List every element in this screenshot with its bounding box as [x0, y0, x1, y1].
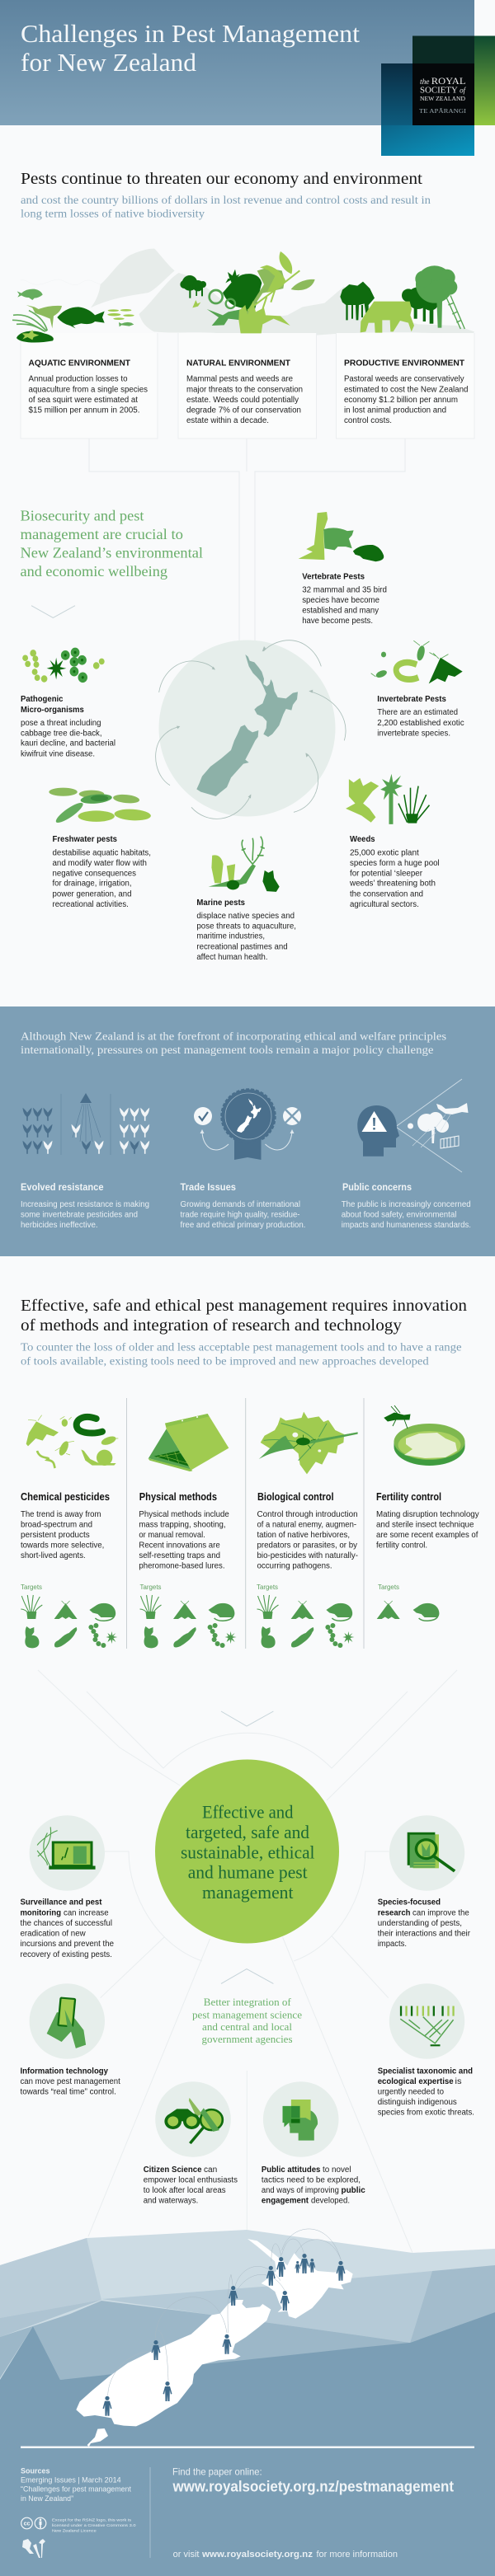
- text: public concerns: impacts and humaneness standards.: [342, 1221, 471, 1230]
- text: weeds: Weeds: [350, 834, 375, 844]
- central goal circle: management: [202, 1882, 294, 1903]
- text: freshwater pests: power generation, and: [53, 889, 132, 899]
- box outline: [178, 333, 317, 439]
- text: biological control: predators or parasites, or by: [257, 1540, 358, 1550]
- column dividers: [127, 1398, 364, 1649]
- text: evolved resistance: [21, 1200, 149, 1230]
- footer: low-poly background: [0, 2230, 495, 2576]
- logo: Royal Society of New Zealand: [381, 36, 495, 156]
- central goal circle: and humane pest: [188, 1862, 308, 1883]
- text: citizen science: empower local enthusiasts: [144, 2176, 238, 2184]
- text: productive body: economy $1.2 billion per annum: [344, 396, 458, 405]
- text: licence: [52, 2518, 136, 2534]
- footer rule: [21, 2447, 474, 2448]
- panel: specialist expertise: [378, 1983, 474, 2118]
- text: sources: Emerging Issues | March 2014: [21, 2476, 121, 2485]
- text: information technology: can move pest management: [20, 2077, 120, 2086]
- icon: phylogenetic tree: [400, 2006, 454, 2045]
- text: physical methods: mass trapping, shooting,: [139, 1519, 226, 1529]
- text: freshwater pests: for drainage, irrigation,: [53, 880, 132, 889]
- text: specialist: [378, 2066, 474, 2118]
- heading: innovation: [21, 1297, 467, 1335]
- text: pathogenic micro-organisms: pose a threat including: [21, 719, 101, 728]
- text: trade issues: free and ethical primary production.: [180, 1221, 305, 1230]
- text: surveillance: Surveillance and pest: [20, 1898, 102, 1907]
- subheading: tools: [21, 1342, 462, 1368]
- icon: binoculars and magnifier: [164, 2098, 223, 2143]
- icon: pathogenic micro-organisms: [22, 648, 105, 683]
- text: weeds: 25,000 exotic plant: [350, 848, 419, 857]
- text: specialist: distinguish indigenous: [378, 2098, 457, 2107]
- text: public attitudes: and ways of improving: [262, 2186, 339, 2195]
- text: pathogenic micro-organisms: kiwifruit vine disease.: [21, 749, 95, 758]
- heading: policy challenge: internationally, pressures on pest management tools remain a major policy challenge: [21, 1044, 434, 1057]
- text: better integration: [192, 1996, 302, 2045]
- label: targets: Targets: [378, 1584, 399, 1591]
- text: evolved resistance: herbicides ineffective.: [21, 1221, 98, 1230]
- text: licence: Except for the RSNZ logo, this work is: [52, 2518, 132, 2523]
- text: surveillance: the chances of successful: [20, 1919, 112, 1928]
- text: surveillance: eradication of new: [20, 1930, 86, 1939]
- label: targets: Targets: [257, 1584, 278, 1591]
- icon: small plant and bird mark: [22, 2539, 45, 2558]
- logo: Royal Society of New Zealand: the ROYAL: [420, 75, 465, 87]
- text: marine pests: [196, 898, 296, 962]
- text: natural body: [186, 374, 303, 425]
- text: fertility control: and sterile insect technique: [376, 1519, 474, 1529]
- central goal circle: [155, 1759, 339, 1944]
- heading: biosecurity: and economic wellbeing: [20, 563, 167, 579]
- text: sources: “Challenges for pest management: [21, 2485, 131, 2494]
- panel: information technology: [20, 1983, 120, 2096]
- icons: natural environment plants and birds: [180, 251, 315, 333]
- text: trade issues: trade require high quality, residue-: [180, 1211, 300, 1220]
- text: public attitudes: engagement: [262, 2196, 309, 2206]
- text: citizen science: [144, 2165, 238, 2206]
- text: species-focused: research: [378, 1908, 411, 1918]
- text: natural body: estate. Weeds could potentially: [186, 396, 299, 405]
- text: biological control: Control through introduction: [257, 1509, 358, 1519]
- label: targets: Targets: [21, 1584, 42, 1591]
- logo: Royal Society of New Zealand: SOCIETY of: [420, 86, 466, 96]
- heading: fertility control: Fertility control: [376, 1491, 441, 1503]
- title: for New Zealand: [21, 48, 196, 77]
- text: vertebrate pests: have become pests.: [302, 617, 373, 626]
- text: fertility control: Mating disruption technology: [376, 1509, 479, 1519]
- icon: creative commons: cc: [24, 2521, 30, 2527]
- logo: Royal Society of New Zealand: TE APĀRANGI: [419, 107, 467, 115]
- heading: biological control: Biological control: [257, 1491, 333, 1503]
- text: more information: for more information: [317, 2550, 398, 2560]
- text: pathogenic micro-organisms: Pathogenic: [21, 694, 64, 704]
- heading: pests continue: Pests continue to threaten our economy and environment: [21, 170, 422, 188]
- icon: creative commons: [21, 2517, 46, 2529]
- text: physical methods: [139, 1509, 229, 1571]
- title: [21, 19, 360, 77]
- icons: productive environment trees and cow: [340, 265, 464, 333]
- text: citizen science: can: [204, 2165, 217, 2175]
- text: species-focused: can improve the: [412, 1909, 469, 1918]
- text: chemical pesticides: persistent products: [21, 1530, 90, 1540]
- icons: aquatic life: [12, 289, 134, 343]
- heading: biosecurity: [20, 508, 203, 579]
- text: licence: licensed under a Creative Commons 3.0: [52, 2523, 136, 2528]
- text: pathogenic micro-organisms: Micro-organisms: [21, 705, 84, 715]
- text: natural body: estate within a decade.: [186, 416, 269, 425]
- icon: freshwater pests: [49, 788, 151, 826]
- text: freshwater pests: and modify water flow with: [53, 859, 147, 868]
- text: natural body: degrade 7% of our conservation: [186, 406, 301, 415]
- icons: fertility targets: [377, 1601, 439, 1621]
- text: weeds: species form a huge pool: [350, 859, 440, 868]
- text: species-focused: understanding of pests,: [378, 1919, 462, 1928]
- text: productive body: Pastoral weeds are conservatively: [344, 374, 464, 384]
- text: species-focused: their interactions and their: [378, 1930, 471, 1939]
- text: freshwater pests: negative consequences: [53, 869, 136, 879]
- text: chemical pesticides: broad-spectrum and: [21, 1519, 92, 1529]
- box outline: [21, 333, 158, 439]
- text: freshwater pests: destabilise aquatic habitats,: [53, 848, 151, 857]
- text: biological control: of a natural enemy, augmen-: [257, 1519, 356, 1529]
- text: freshwater pests: Freshwater pests: [53, 834, 117, 844]
- text: more information: or visit: [173, 2550, 200, 2560]
- text: surveillance: incursions and prevent the: [20, 1940, 114, 1949]
- text: better integration: pest management science: [192, 2009, 302, 2021]
- text: aquatic body: of sea squirt were estimated at: [28, 396, 138, 405]
- icon: wasp and petri dish: [384, 1405, 465, 1466]
- text: productive body: [344, 374, 469, 425]
- icon: laptop and DNA: [37, 1827, 96, 1870]
- text: aquatic body: [28, 374, 148, 415]
- panel: natural environment: [178, 333, 317, 439]
- heading: physical methods: Physical methods: [139, 1491, 217, 1503]
- text: chemical pesticides: towards more selective,: [21, 1540, 104, 1550]
- text: sources: Sources: [21, 2467, 50, 2476]
- text: productive body: control costs.: [344, 416, 392, 425]
- icon: trap: [148, 1414, 229, 1471]
- heading: policy challenge: Although New Zealand is at the forefront of incorporating ethical and welfare principles: [21, 1031, 446, 1044]
- text: public attitudes: tactics need to be explored,: [262, 2176, 361, 2184]
- icon: hands and phone: [47, 1998, 86, 2048]
- text: find the paper online: Find the paper online:: [172, 2466, 262, 2478]
- panel: aquatic environment: [21, 333, 158, 439]
- subheading: cost of pests: long term losses of native biodiversity: [21, 208, 205, 219]
- text: citizen science: to look after local areas: [144, 2186, 226, 2195]
- text: aquatic body: Annual production losses to: [28, 374, 128, 384]
- text: marine pests: Marine pests: [196, 898, 245, 908]
- text: public attitudes: [262, 2165, 365, 2206]
- text: productive body: in lost animal production and: [344, 406, 446, 415]
- text: citizen science: Citizen Science: [144, 2165, 202, 2175]
- panel: biological control: [257, 1412, 358, 1648]
- text: public attitudes: Public attitudes: [262, 2165, 321, 2175]
- panel: chemical pesticides: [21, 1415, 118, 1648]
- text: surveillance: monitoring: [20, 1908, 61, 1918]
- text: freshwater pests: [53, 834, 151, 909]
- text: pathogenic micro-organisms: kauri decline, and bacterial: [21, 739, 116, 748]
- text: specialist: urgently needed to: [378, 2088, 444, 2097]
- heading: biosecurity: management are crucial to: [20, 526, 183, 542]
- text: chemical pesticides: [21, 1509, 104, 1560]
- panel: citizen science: [144, 2081, 238, 2206]
- text: marine pests: recreational pastimes and: [196, 942, 288, 951]
- panel: public attitudes: [262, 2081, 365, 2206]
- icon: head and speech bubbles: [283, 2100, 318, 2141]
- text: sources: [21, 2467, 131, 2503]
- text: natural body: Mammal pests and weeds are: [186, 374, 293, 384]
- text: weeds: [349, 834, 440, 909]
- text: physical methods: Physical methods include: [139, 1509, 229, 1519]
- icon: invertebrate pests: [371, 640, 463, 683]
- text: specialist: species from exotic threats.: [378, 2109, 474, 2118]
- text: specialist: Specialist taxonomic and: [378, 2066, 473, 2076]
- text: chemical pesticides: The trend is away from: [21, 1509, 101, 1519]
- text: surveillance: [20, 1898, 114, 1959]
- text: vertebrate pests: species have become: [302, 596, 380, 605]
- icon: evolved resistance sprouts and spray: [23, 1093, 149, 1155]
- text: species-focused: [378, 1898, 471, 1949]
- text: evolved resistance: Increasing pest resistance is making: [21, 1200, 149, 1209]
- central goal circle: sustainable, ethical: [181, 1842, 315, 1862]
- connector lines: tools to central goal: [38, 1670, 457, 2253]
- panel: species-focused research: [378, 1815, 471, 1949]
- text: weeds: weeds’ threatening both: [349, 880, 436, 889]
- text: better integration: Better integration of: [204, 1996, 291, 2008]
- text: public attitudes: public: [342, 2185, 365, 2195]
- text: species-focused: impacts.: [378, 1940, 407, 1949]
- text: species-focused: Species-focused: [378, 1898, 441, 1907]
- text: invertebrate pests: [377, 694, 464, 739]
- subheading: tools: of tools available, existing tools need to be improved and new approaches developed: [21, 1355, 429, 1368]
- heading: public concerns: Public concerns: [342, 1181, 412, 1193]
- text: evolved resistance: some invertebrate pesticides and: [21, 1211, 138, 1220]
- text: public concerns: The public is increasingly concerned: [342, 1200, 471, 1209]
- heading: evolved resistance: Evolved resistance: [21, 1181, 104, 1193]
- text: surveillance: recovery of existing pests.: [20, 1950, 112, 1959]
- arrow: chevron down: [31, 606, 75, 617]
- text: invertebrate pests: invertebrate species.: [377, 729, 450, 739]
- header band: [0, 0, 474, 125]
- icons: chemical targets: [21, 1595, 117, 1648]
- heading: innovation: Effective, safe and ethical pest management requires innovation: [21, 1297, 467, 1315]
- text: vertebrate pests: 32 mammal and 35 bird: [302, 585, 387, 594]
- text: vertebrate pests: established and many: [302, 607, 379, 615]
- icons: physical targets: [140, 1595, 237, 1648]
- text: trade issues: [180, 1200, 305, 1230]
- subheading: cost of pests: [21, 194, 431, 219]
- people figures: [102, 2254, 345, 2416]
- text: specialist: is: [455, 2077, 462, 2086]
- text: trade issues: Growing demands of international: [180, 1200, 300, 1209]
- text: weeds: for potential ‘sleeper: [350, 869, 423, 879]
- text: physical methods: self-resetting traps and: [139, 1551, 220, 1560]
- text: vertebrate pests: [302, 571, 387, 626]
- panel: productive environment: [337, 333, 474, 439]
- title: Challenges in Pest Management: [21, 19, 360, 48]
- icon: marine pests: [209, 837, 280, 892]
- panel: physical methods: [139, 1414, 237, 1648]
- text: weeds: agricultural sectors.: [350, 900, 419, 909]
- heading: trade issues: Trade Issues: [180, 1181, 236, 1193]
- text: public attitudes: to novel: [323, 2165, 351, 2175]
- text: invertebrate pests: There are an estimated: [377, 708, 458, 717]
- arrows: pest pathways into map: [156, 640, 346, 819]
- icon: chemical pesticides pests: [26, 1415, 118, 1468]
- text: paper URL: www.royalsociety.org.nz/pestmanagement: [172, 2479, 454, 2495]
- text: marine pests: affect human health.: [196, 953, 267, 962]
- icons: biological targets: [257, 1595, 354, 1648]
- text: marine pests: displace native species and: [196, 912, 295, 921]
- text: better integration: government agencies: [201, 2033, 292, 2045]
- panel: fertility control: [376, 1405, 479, 1621]
- icon: trade badge: [194, 1090, 301, 1160]
- text: pathogenic micro-organisms: cabbage tree die-back,: [21, 729, 102, 739]
- icon: public concerns head and sightlines: [357, 1079, 469, 1172]
- text: fertility control: fertility control.: [376, 1540, 427, 1550]
- footer map: New Zealand with people: [76, 2229, 353, 2447]
- text: biological control: tation of native herbivores,: [257, 1530, 350, 1540]
- text: marine pests: pose threats to aquaculture,: [196, 922, 296, 931]
- logo: Royal Society of New Zealand: NEW ZEALAND: [420, 95, 466, 102]
- central goal circle: targeted, safe and: [186, 1822, 309, 1842]
- panel: policy challenge band: [0, 1006, 495, 1256]
- text: information technology: [20, 2066, 120, 2096]
- text: fertility control: [376, 1509, 479, 1550]
- heading: chemical pesticides: Chemical pesticides: [21, 1491, 110, 1503]
- text: information technology: Information technology: [20, 2066, 108, 2076]
- heading: policy challenge: [21, 1031, 446, 1057]
- text: information technology: towards “real time” control.: [20, 2087, 116, 2096]
- landscape background: hills and water: [21, 249, 474, 335]
- map: New Zealand in circle: [158, 640, 335, 816]
- box outline: [337, 333, 474, 439]
- text: weeds: the conservation and: [350, 889, 423, 899]
- text: biological control: occurring pathogens.: [257, 1561, 332, 1571]
- text: specialist: ecological expertise: [378, 2076, 454, 2086]
- heading: aquatic environment: AQUATIC ENVIRONMENT: [28, 358, 131, 368]
- icon: weeds: [346, 774, 429, 824]
- connector lines: environments to map: [89, 439, 405, 640]
- icon: vertebrate pests: [299, 512, 384, 561]
- arrow: chevron down to goal: [221, 1711, 273, 1726]
- text: marine pests: maritime industries,: [196, 932, 265, 941]
- text: more information: www.royalsociety.org.nz: [201, 2550, 314, 2560]
- text: invertebrate pests: 2,200 established exotic: [377, 719, 464, 728]
- text: physical methods: or manual removal.: [139, 1530, 205, 1540]
- text: public concerns: about food safety, environmental: [342, 1211, 456, 1220]
- text: surveillance: can increase: [64, 1909, 109, 1918]
- text: vertebrate pests: Vertebrate Pests: [302, 571, 365, 581]
- text: more information: [173, 2550, 398, 2560]
- panel: surveillance and monitoring: [20, 1815, 114, 1959]
- text: chemical pesticides: short-lived agents.: [21, 1551, 86, 1560]
- text: pathogenic micro-organisms: [21, 694, 116, 758]
- text: better integration: and central and local: [202, 2020, 292, 2033]
- heading: biosecurity: Biosecurity and pest: [20, 508, 144, 524]
- subheading: cost of pests: and cost the country billions of dollars in lost revenue and control costs and result in: [21, 194, 431, 206]
- text: citizen science: and waterways.: [144, 2196, 198, 2206]
- footer divider: [149, 2467, 151, 2558]
- text: public concerns: [342, 1200, 471, 1230]
- arrow: chevron up from integration: [221, 1969, 273, 1983]
- icon: leaf and beetle: [259, 1412, 358, 1474]
- text: invertebrate pests: Invertebrate Pests: [377, 694, 446, 704]
- text: aquatic body: $15 million per annum in 2005.: [28, 406, 140, 415]
- text: productive body: estimated to cost the New Zealand: [344, 385, 469, 394]
- text: licence: New Zealand Licence: [52, 2529, 97, 2534]
- text: sources: in New Zealand”: [21, 2494, 73, 2503]
- text: fertility control: are some recent examples of: [376, 1530, 478, 1540]
- text: public attitudes: developed.: [311, 2196, 350, 2206]
- text: biological control: bio-pesticides with naturally-: [257, 1551, 358, 1560]
- text: biological control: [257, 1509, 358, 1571]
- central goal circle: Effective and: [202, 1802, 294, 1823]
- text: physical methods: Recent innovations are: [139, 1540, 220, 1550]
- icon: papers and magnifier: [408, 1832, 455, 1871]
- arcs: connections between people: [108, 2229, 341, 2395]
- heading: biosecurity: New Zealand’s environmental: [20, 545, 203, 561]
- subheading: tools: To counter the loss of older and less acceptable pest management tools and to have a range: [21, 1342, 462, 1354]
- heading: natural environment: NATURAL ENVIRONMENT: [186, 358, 291, 368]
- heading: productive environment: PRODUCTIVE ENVIRONMENT: [344, 358, 465, 368]
- text: freshwater pests: recreational activities.: [53, 900, 129, 909]
- heading: innovation: of methods and integration of research and technology: [21, 1316, 403, 1335]
- text: physical methods: pheromone-based lures.: [139, 1561, 224, 1571]
- label: targets: Targets: [140, 1584, 162, 1591]
- text: aquatic body: aquaculture from a single species: [28, 385, 148, 394]
- text: natural body: major threats to the conservation: [186, 385, 303, 394]
